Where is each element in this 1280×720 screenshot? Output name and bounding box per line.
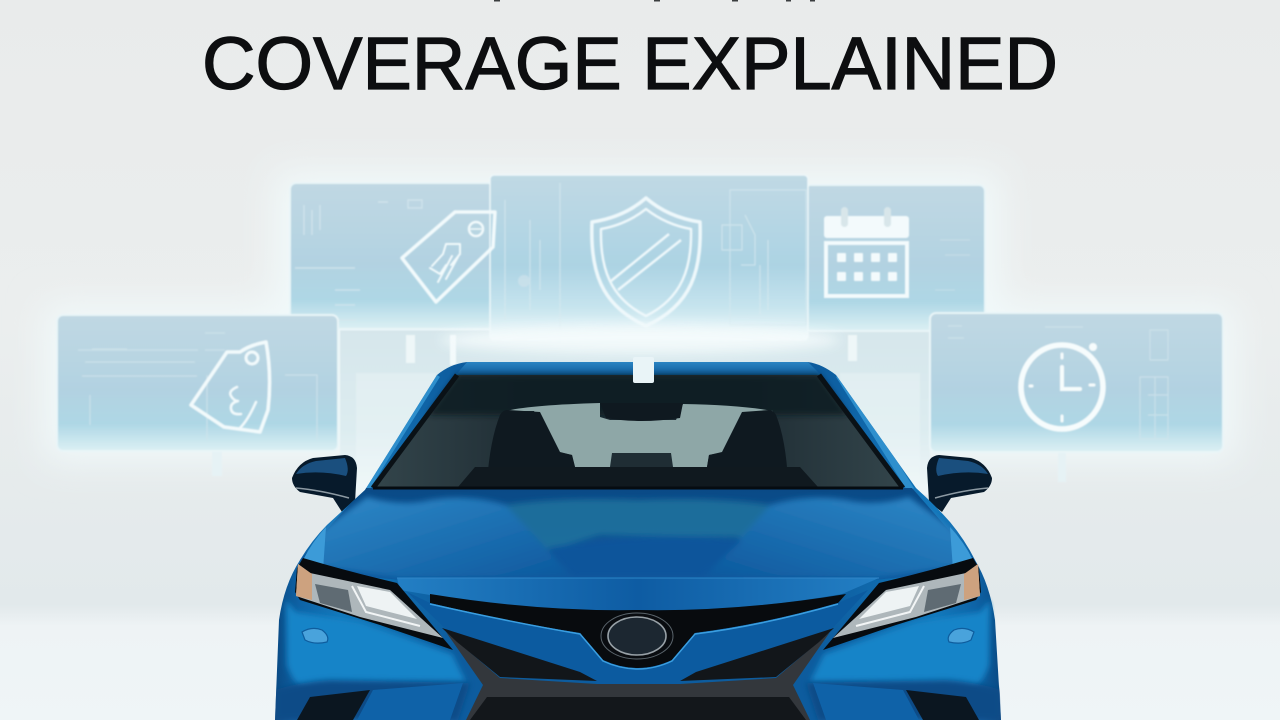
car: upper grille [430, 594, 846, 668]
car: windscreen [373, 375, 903, 488]
car: headlight [295, 558, 453, 650]
panel: lower left tag [57, 315, 338, 451]
car: right front corner [806, 558, 1001, 720]
panel: lower backing screens [212, 330, 1066, 495]
car: body shading [300, 362, 975, 610]
car: left front corner [275, 558, 470, 720]
panel glow [45, 172, 1235, 460]
panel detail marks [948, 326, 1168, 439]
panel: upper right calendar [804, 185, 985, 331]
car: lower centre grille [470, 697, 806, 720]
title: COVERAGE EXPLAINED [202, 22, 1058, 105]
icon: price tag upper [402, 212, 495, 302]
car: body shell [275, 362, 1001, 720]
icon: clock [1021, 344, 1103, 429]
car: grey lower fascia [446, 632, 830, 720]
title fragment cropped at top edge [494, 0, 815, 2]
panel: upper left tag [290, 183, 495, 329]
panel: lower right clock [930, 313, 1223, 452]
car: rear-view mirror mount [633, 357, 654, 383]
car: bumper band highlight [430, 604, 838, 669]
panel detail marks [295, 200, 422, 320]
car [275, 357, 1001, 720]
icon: price tag lower [191, 342, 270, 432]
car: blue V bumper band [407, 590, 868, 684]
panel detail marks [935, 240, 970, 290]
panel: centre shield [490, 175, 808, 340]
car: left mirror [292, 455, 357, 512]
panel detail marks [78, 333, 317, 440]
car: right mirror [927, 455, 992, 512]
panel detail marks [505, 183, 806, 329]
car: emblem [601, 613, 673, 659]
glow above car [440, 326, 840, 354]
car: lower side grilles [442, 628, 834, 681]
icon: calendar [824, 207, 909, 296]
icon: shield [592, 198, 700, 326]
